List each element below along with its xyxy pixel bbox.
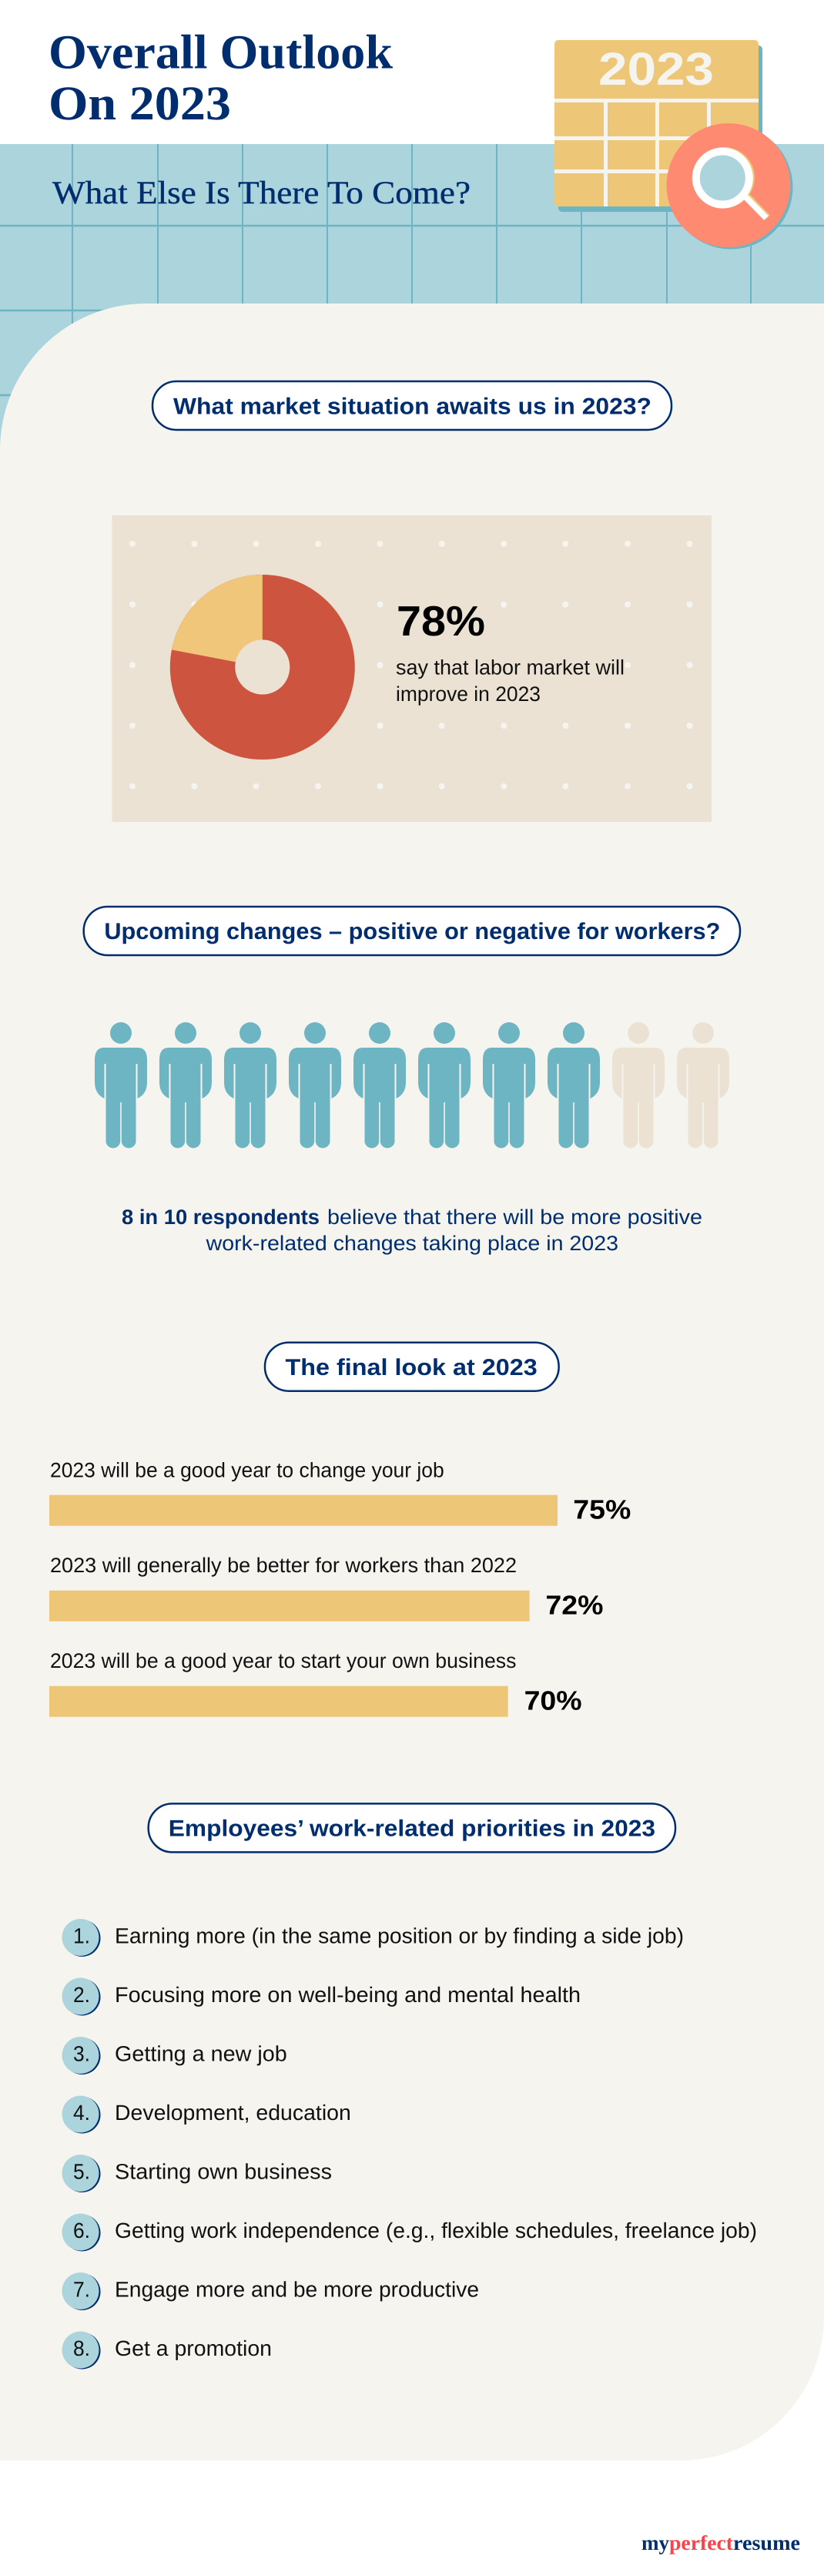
icon: magnifying glass bbox=[667, 123, 793, 250]
bar: change your job 75%: 75% bbox=[573, 1495, 631, 1525]
heading pill: upcoming changes bbox=[84, 907, 740, 955]
item 6: Getting work independence (e.g., flexible schedules, freelance job) bbox=[115, 2219, 757, 2242]
numbered list: priorities bbox=[62, 1919, 757, 2370]
subtitle: What Else Is There To Come? bbox=[52, 176, 471, 211]
bar: start own business 70% bbox=[49, 1649, 582, 1717]
item 8 bbox=[62, 2331, 272, 2370]
text: 8 in 10 respondents: work-related changes taking place in 2023 bbox=[206, 1232, 618, 1255]
heading pill: market situation: What market situation awaits us in 2023? bbox=[173, 394, 651, 419]
pictogram: 8 of 10 people bbox=[95, 1022, 729, 1148]
item 3: 3. bbox=[73, 2041, 90, 2066]
item 3: Getting a new job bbox=[115, 2041, 287, 2066]
logo: myperfectresume: my bbox=[641, 2531, 669, 2554]
panel: labor market stat bbox=[112, 515, 712, 822]
item 5: Starting own business bbox=[115, 2160, 332, 2183]
item 7 bbox=[62, 2272, 479, 2310]
item 7: Engage more and be more productive bbox=[115, 2277, 479, 2302]
item 4: Development, education bbox=[115, 2101, 351, 2125]
bar: start own business 70%: 2023 will be a good year to start your own business bbox=[50, 1649, 516, 1672]
text: 8 in 10 respondents: believe that there will be more positive bbox=[327, 1206, 702, 1229]
icon: calendar 2023: 2023 bbox=[598, 43, 714, 95]
item 5: 5. bbox=[73, 2160, 90, 2183]
text: 8 in 10 respondents bbox=[122, 1206, 702, 1255]
heading pill: final look: The final look at 2023 bbox=[285, 1355, 538, 1380]
stat description bbox=[396, 656, 625, 706]
title: On 2023 bbox=[49, 76, 231, 130]
logo: myperfectresume bbox=[641, 2531, 800, 2554]
title: Overall Outlook bbox=[49, 25, 393, 79]
heading pill: priorities: Employees’ work-related priorities in 2023 bbox=[169, 1816, 655, 1842]
heading pill: upcoming changes: Upcoming changes – positive or negative for workers? bbox=[104, 919, 720, 944]
bar: better for workers 72%: 2023 will generally be better for workers than 2022 bbox=[50, 1554, 517, 1577]
item 2: 2. bbox=[73, 1983, 90, 2007]
item 4: 4. bbox=[73, 2101, 90, 2125]
item 4 bbox=[62, 2095, 351, 2134]
item 5 bbox=[62, 2155, 332, 2192]
item 3 bbox=[62, 2037, 287, 2075]
stat description: say that labor market will bbox=[396, 656, 625, 679]
item 1: Earning more (in the same position or by finding a side job) bbox=[115, 1924, 684, 1947]
title bbox=[49, 25, 393, 130]
stat description: improve in 2023 bbox=[396, 683, 541, 706]
bar chart: final look at 2023 bbox=[49, 1458, 631, 1717]
header band with grid bbox=[0, 144, 824, 498]
item 6: 6. bbox=[73, 2219, 90, 2242]
logo: myperfectresume: perfect bbox=[669, 2531, 733, 2554]
item 7: 7. bbox=[73, 2277, 90, 2302]
heading pill: final look bbox=[265, 1343, 559, 1391]
item 8: Get a promotion bbox=[115, 2336, 272, 2360]
item 1: 1. bbox=[73, 1924, 90, 1947]
bar: better for workers 72% bbox=[49, 1554, 603, 1622]
item 6 bbox=[62, 2214, 757, 2251]
item 1 bbox=[62, 1919, 684, 1957]
stat value: 78% bbox=[397, 597, 485, 645]
icon: calendar 2023 bbox=[554, 40, 762, 212]
text: 8 in 10 respondents: 8 in 10 respondents bbox=[122, 1206, 320, 1229]
heading pill: market situation bbox=[152, 381, 672, 430]
bar: change your job 75%: 2023 will be a good year to change your job bbox=[50, 1458, 444, 1481]
heading pill: priorities bbox=[149, 1803, 675, 1852]
bar: better for workers 72%: 72% bbox=[545, 1591, 603, 1621]
logo: myperfectresume: resume bbox=[733, 2531, 800, 2554]
item 8: 8. bbox=[73, 2336, 90, 2360]
bar: change your job 75% bbox=[49, 1458, 631, 1526]
donut chart: 78 percent bbox=[170, 575, 355, 760]
item 2: Focusing more on well-being and mental health bbox=[115, 1983, 581, 2007]
bar: start own business 70%: 70% bbox=[524, 1686, 582, 1716]
item 2 bbox=[62, 1978, 581, 2015]
